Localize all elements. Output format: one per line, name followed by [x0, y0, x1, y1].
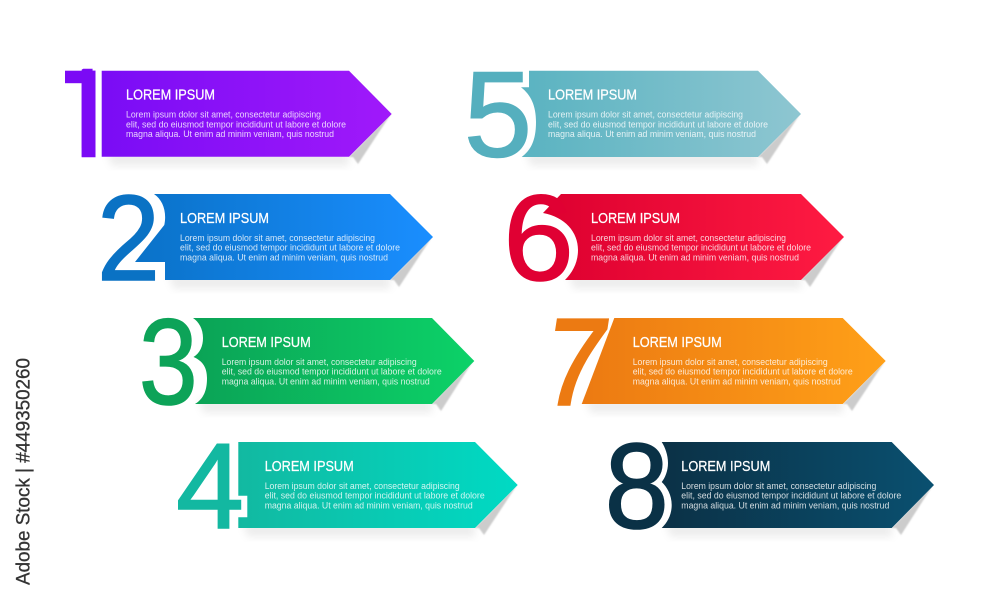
heading 4: LOREM IPSUM: [265, 459, 354, 475]
body 4: magna aliqua. Ut enim ad minim veniam, quis nostrud: [265, 500, 473, 510]
stock id caption: Adobe Stock | #449350260: [14, 358, 34, 585]
numeral 4: 4: [176, 418, 244, 554]
numeral 7: 7: [536, 294, 617, 430]
item 8: [605, 418, 934, 554]
body 2: elit, sed do eiusmod tempor incididunt ut labore et dolore: [180, 243, 400, 253]
arrow 8: [662, 442, 934, 528]
item 7: [536, 294, 886, 430]
numeral 6: 6: [503, 170, 574, 306]
item 2: [97, 170, 433, 306]
heading 1: LOREM IPSUM: [126, 88, 215, 104]
body 6: [591, 233, 811, 262]
body 5: [548, 110, 768, 139]
numeral 1: 1: [51, 16, 117, 193]
arrow 4: [238, 442, 518, 528]
body 7: [633, 357, 853, 386]
body 2: magna aliqua. Ut enim ad minim veniam, quis nostrud: [180, 252, 388, 262]
item 1: [65, 68, 392, 166]
body 2: [180, 233, 400, 262]
item 5: [464, 47, 801, 183]
body 2: Lorem ipsum dolor sit amet, consectetur adipiscing: [180, 233, 375, 243]
arrow 2: [135, 194, 433, 280]
heading 6: LOREM IPSUM: [591, 211, 680, 227]
body 4: [265, 481, 485, 510]
item 3: [139, 294, 474, 430]
numeral 5: 5: [464, 47, 532, 183]
arrow 5: [521, 71, 801, 157]
arrow 3: [193, 318, 474, 404]
arrow 6: [543, 194, 844, 280]
body 4: Lorem ipsum dolor sit amet, consectetur adipiscing: [265, 481, 460, 491]
numeral 2: 2: [97, 170, 160, 306]
numeral 3: 3: [139, 294, 198, 430]
body 7: magna aliqua. Ut enim ad minim veniam, quis nostrud: [633, 376, 841, 386]
heading 7: LOREM IPSUM: [633, 335, 722, 351]
heading 2: LOREM IPSUM: [180, 211, 269, 227]
body 7: elit, sed do eiusmod tempor incididunt ut labore et dolore: [633, 367, 853, 377]
numeral 1: [65, 68, 96, 158]
heading 3: LOREM IPSUM: [222, 335, 311, 351]
numeral 8: 8: [605, 418, 669, 554]
body 7: Lorem ipsum dolor sit amet, consectetur adipiscing: [633, 357, 828, 367]
arrow 1: [102, 71, 392, 157]
item 4: [176, 418, 518, 554]
body 8: Lorem ipsum dolor sit amet, consectetur adipiscing: [681, 481, 876, 491]
body 1: elit, sed do eiusmod tempor incididunt ut labore et dolore: [126, 119, 346, 129]
heading 5: LOREM IPSUM: [548, 88, 637, 104]
body 5: magna aliqua. Ut enim ad minim veniam, quis nostrud: [548, 129, 756, 139]
body 5: Lorem ipsum dolor sit amet, consectetur adipiscing: [548, 110, 743, 120]
arrow 7: [582, 318, 886, 404]
body 1: magna aliqua. Ut enim ad minim veniam, quis nostrud: [126, 129, 334, 139]
body 4: elit, sed do eiusmod tempor incididunt ut labore et dolore: [265, 491, 485, 501]
body 3: [222, 357, 442, 386]
body 1: Lorem ipsum dolor sit amet, consectetur adipiscing: [126, 110, 321, 120]
body 3: magna aliqua. Ut enim ad minim veniam, quis nostrud: [222, 376, 430, 386]
body 8: elit, sed do eiusmod tempor incididunt ut labore et dolore: [681, 491, 901, 501]
body 3: Lorem ipsum dolor sit amet, consectetur adipiscing: [222, 357, 417, 367]
body 5: elit, sed do eiusmod tempor incididunt ut labore et dolore: [548, 119, 768, 129]
body 6: magna aliqua. Ut enim ad minim veniam, quis nostrud: [591, 252, 799, 262]
heading 8: LOREM IPSUM: [681, 459, 770, 475]
body 8: [681, 481, 901, 510]
body 1: [126, 110, 346, 139]
body 6: elit, sed do eiusmod tempor incididunt ut labore et dolore: [591, 243, 811, 253]
body 8: magna aliqua. Ut enim ad minim veniam, quis nostrud: [681, 500, 889, 510]
item 6: [503, 170, 844, 306]
body 3: elit, sed do eiusmod tempor incididunt ut labore et dolore: [222, 367, 442, 377]
body 6: Lorem ipsum dolor sit amet, consectetur adipiscing: [591, 233, 786, 243]
